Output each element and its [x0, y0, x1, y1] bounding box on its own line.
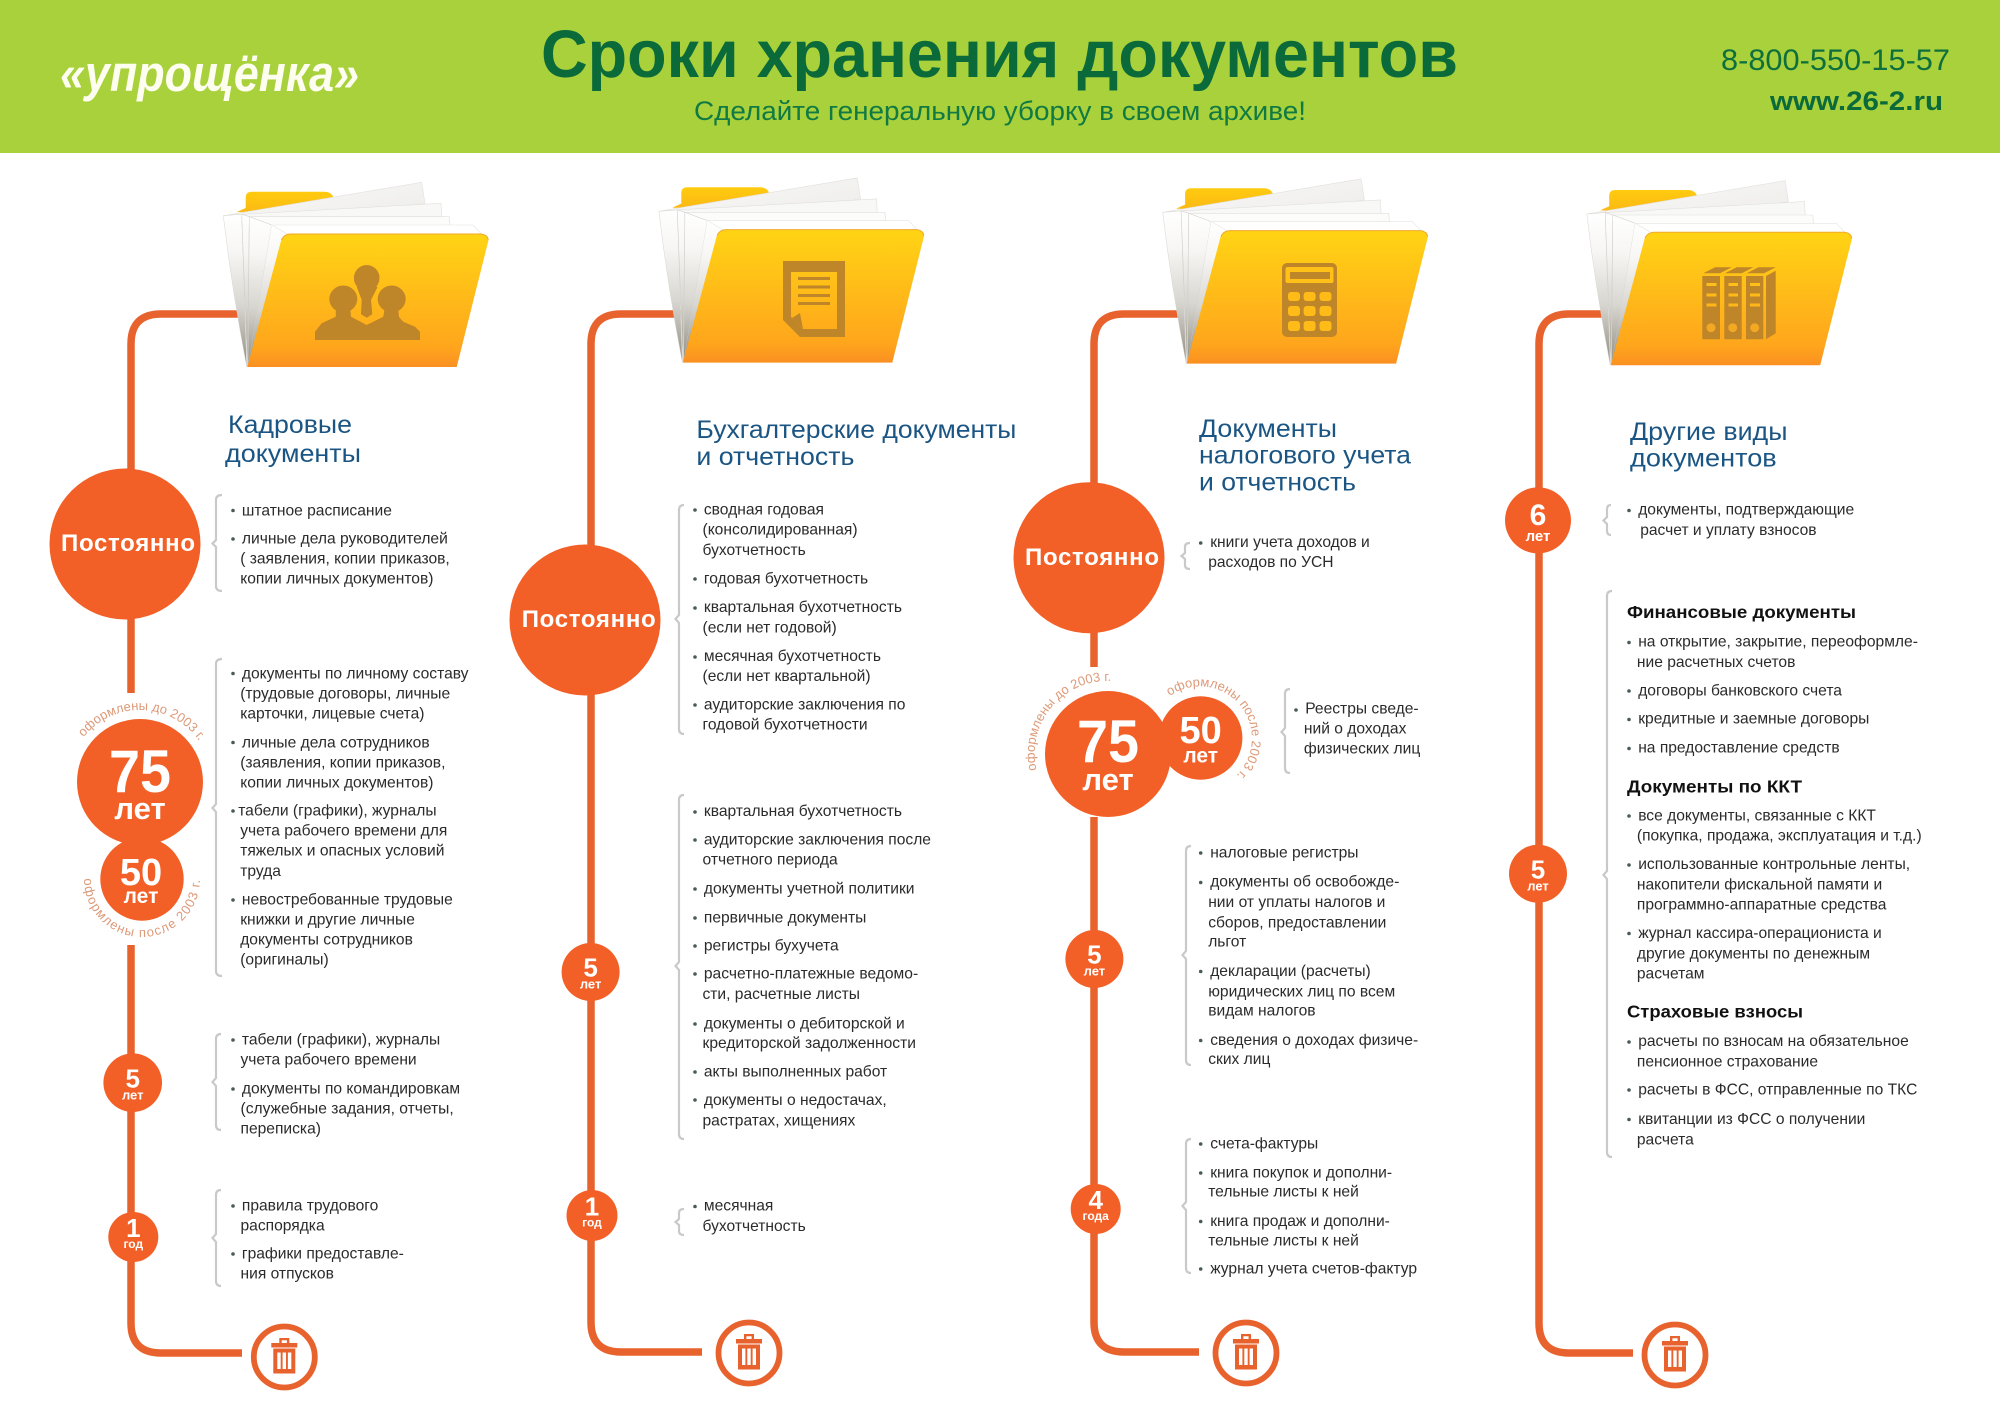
list: permanent: ( заявления, копии приказов,	[240, 550, 450, 567]
badge: 5 years: 5	[125, 1063, 140, 1093]
list: 5 years: все документы, связанные с ККТ	[1638, 807, 1876, 824]
list: 5 years: документы о дебиторской и	[704, 1015, 905, 1032]
list: 5 years	[1182, 844, 1418, 1068]
list: 75/50 years: табели (графики), журналы	[238, 802, 437, 819]
list: permanent: личные дела руководителей	[242, 530, 448, 547]
badge: 5 years	[1509, 845, 1567, 903]
list: 6 years	[1604, 502, 1854, 539]
heading: налогового учета	[1199, 441, 1411, 469]
timeline	[1539, 314, 1633, 1353]
list: 5 years: видам налогов	[1208, 1002, 1316, 1019]
list: 75/50 years	[212, 659, 469, 976]
list: 5 years: ских лиц	[1208, 1051, 1270, 1068]
badge: 4 years	[1071, 1184, 1121, 1234]
list: 5 years: юридических лиц по всем	[1208, 983, 1395, 1000]
list: 5 years: на предоставление средств	[1638, 740, 1840, 757]
heading: financial documents: Финансовые документы	[1627, 602, 1856, 622]
phone: 8-800-550-15-57	[1721, 44, 1950, 77]
title: Сроки хранения документов	[541, 17, 1458, 92]
header band	[0, 0, 2000, 153]
list: 5 years: на открытие, закрытие, переоформле-	[1638, 633, 1918, 650]
panel: other documents	[1505, 181, 1922, 1386]
panel: accounting documents	[510, 178, 1016, 1383]
list: 5 years: сборов, предоставлении	[1208, 914, 1386, 931]
folder with binders icon	[1587, 181, 1852, 365]
timeline	[591, 314, 702, 1352]
list: 75/50 years: личные дела сотрудников	[242, 734, 430, 751]
folder with calculator icon	[1163, 179, 1428, 364]
badge: 5 years: лет	[122, 1087, 143, 1102]
panel: personnel documents	[50, 182, 489, 1390]
list: 75/50 years: Реестры сведе-	[1305, 701, 1419, 718]
badge: 75 and 50 years	[1025, 672, 1261, 817]
badge: 1 year: год	[123, 1237, 143, 1251]
folder with people icon	[223, 182, 488, 367]
list: 1 year: ния отпусков	[241, 1265, 334, 1282]
list: 5 years: нии от уплаты налогов и	[1208, 894, 1385, 911]
list: 5 years: кредиторской задолженности	[702, 1035, 916, 1052]
list: 75/50 years: копии личных документов)	[240, 774, 433, 791]
heading	[225, 411, 361, 468]
list: 5 years: использованные контрольные ленты,	[1638, 856, 1910, 873]
list: 5 years	[1604, 591, 1922, 1157]
list: 5 years: другие документы по денежным	[1637, 945, 1870, 962]
list: 5 years: растратах, хищениях	[702, 1112, 855, 1129]
list: 75/50 years: ний о доходах	[1304, 721, 1407, 738]
badge: 1 year: 1	[126, 1213, 141, 1243]
badge: permanent: Постоянно	[61, 530, 195, 557]
list: 5 years: первичные документы	[704, 909, 866, 926]
badge: 75 and 50 years: 50	[120, 852, 162, 894]
list: 1 year: правила трудового	[242, 1197, 379, 1214]
list: 5 years: акты выполненных работ	[704, 1064, 887, 1081]
badge: 75 and 50 years: оформлены после 2003 г.	[1167, 679, 1261, 778]
list: 4 years: счета-фактуры	[1210, 1135, 1318, 1152]
heading	[696, 416, 1016, 471]
badge: 5 years: 5	[1087, 940, 1102, 970]
list: 4 years: книга покупок и дополни-	[1210, 1164, 1392, 1181]
logo: «упрощёнка»	[60, 45, 359, 102]
list: 5 years: (служебные задания, отчеты,	[241, 1100, 454, 1117]
badge: 75 and 50 years: оформлены после 2003 г.	[82, 878, 200, 938]
list: permanent: сводная годовая	[704, 501, 824, 518]
list: 5 years: льгот	[1208, 933, 1246, 950]
list: 75/50 years: невостребованные трудовые	[242, 891, 453, 908]
list: 75/50 years: труда	[240, 863, 281, 880]
badge: 6 years: лет	[1526, 528, 1550, 545]
list: 5 years: документы об освобожде-	[1210, 874, 1399, 891]
list: permanent	[1182, 534, 1370, 571]
list: 75/50 years: (оригиналы)	[240, 951, 329, 968]
list: 4 years: книга продаж и дополни-	[1210, 1213, 1390, 1230]
badge: 6 years: 6	[1530, 499, 1546, 532]
heading: и отчетность	[696, 443, 854, 471]
list: 4 years: тельные листы к ней	[1208, 1183, 1359, 1200]
icon: trash	[254, 1326, 315, 1388]
subtitle: Сделайте генеральную уборку в своем архиве!	[694, 96, 1306, 126]
list: permanent: квартальная бухотчетность	[704, 599, 902, 616]
list: 5 years: документы по командировкам	[242, 1080, 460, 1097]
panel: tax documents	[1014, 178, 1428, 1386]
timeline	[131, 314, 243, 1353]
list: 1 year: графики предоставле-	[242, 1245, 404, 1262]
icon: trash	[1644, 1324, 1706, 1386]
list: permanent: копии личных документов)	[240, 571, 433, 588]
badge: 75 and 50 years: лет	[1082, 762, 1134, 797]
badge: 5 years	[1065, 930, 1123, 988]
badge: 6 years	[1505, 487, 1571, 553]
list: 75/50 years: документы сотрудников	[240, 931, 413, 948]
badge: 4 years: 4	[1088, 1185, 1103, 1215]
badge: permanent: Постоянно	[522, 606, 656, 633]
list: 4 years: журнал учета счетов-фактур	[1210, 1260, 1417, 1277]
badge: 5 years: 5	[1531, 854, 1545, 884]
list: permanent	[676, 501, 906, 734]
heading: insurance contributions: Страховые взносы	[1627, 1002, 1803, 1022]
list: 75/50 years: учета рабочего времени для	[240, 822, 447, 839]
list: permanent: (консолидированная)	[702, 522, 858, 539]
list: 6 years: документы, подтверждающие	[1638, 502, 1854, 519]
badge: 4 years: года	[1083, 1209, 1109, 1223]
list: 5 years: табели (графики), журналы	[242, 1031, 440, 1048]
icon: trash	[1216, 1322, 1276, 1384]
list: 5 years: документы учетной политики	[704, 880, 914, 897]
icon: trash	[718, 1322, 780, 1384]
list: permanent: годовой бухотчетности	[702, 716, 868, 733]
list: 5 years: расчетам	[1637, 965, 1705, 982]
list: 5 years: программно-аппаратные средства	[1637, 896, 1887, 913]
list: 5 years: накопители фискальной памяти и	[1637, 876, 1882, 893]
list: permanent	[212, 495, 450, 591]
badge: 1 year: год	[582, 1216, 602, 1230]
list: 75/50 years: карточки, лицевые счета)	[240, 705, 424, 722]
list: 75/50 years	[1282, 689, 1420, 773]
list: 6 years: расчет и уплату взносов	[1640, 522, 1817, 539]
badge: 75 and 50 years: 50	[1180, 710, 1222, 752]
badge: 1 year	[108, 1212, 158, 1262]
badge: 5 years: лет	[580, 977, 601, 992]
list: 5 years: (покупка, продажа, эксплуатация и т.д.)	[1637, 827, 1922, 844]
list: 5 years: кредитные и заемные договоры	[1638, 711, 1869, 728]
list: 75/50 years: документы по личному составу	[242, 665, 469, 682]
timeline	[1094, 314, 1199, 1352]
badge: 5 years: лет	[1084, 964, 1105, 979]
folder with document icon	[659, 178, 924, 363]
list: 5 years: аудиторские заключения после	[704, 831, 931, 848]
list: 5 years: расчета	[1637, 1131, 1694, 1148]
heading: Другие виды	[1630, 418, 1788, 446]
list: 1 year	[676, 1198, 806, 1235]
list: 5 years: ние расчетных счетов	[1637, 654, 1795, 671]
badge: 75 and 50 years	[77, 703, 204, 938]
list: 5 years: договоры банковского счета	[1638, 682, 1842, 699]
badge: 1 year	[566, 1190, 618, 1241]
heading: и отчетность	[1199, 469, 1356, 497]
badge: 5 years: лет	[1527, 878, 1549, 893]
badge: 75 and 50 years: 75	[109, 738, 171, 805]
list: 5 years: документы о недостачах,	[704, 1092, 887, 1109]
list: permanent: аудиторские заключения по	[704, 696, 906, 713]
badge: 75 and 50 years: 75	[1077, 708, 1139, 775]
list: 5 years: сти, расчетные листы	[702, 986, 860, 1003]
list: permanent: (если нет годовой)	[702, 619, 837, 636]
badge: permanent	[1014, 482, 1164, 633]
list: 5 years: налоговые регистры	[1210, 844, 1359, 861]
badge: 75 and 50 years: лет	[124, 885, 158, 908]
list: 5 years: журнал кассира-операциониста и	[1638, 925, 1882, 942]
list: 1 year: распорядка	[241, 1217, 325, 1234]
badge: permanent: Постоянно	[1025, 544, 1159, 571]
badge: 75 and 50 years: лет	[114, 791, 166, 826]
list: 5 years: переписка)	[241, 1120, 321, 1137]
website: www.26-2.ru	[1769, 86, 1943, 116]
list: 75/50 years: (заявления, копии приказов,	[240, 754, 445, 771]
badge: 75 and 50 years: оформлены до 2003 г.	[80, 703, 204, 740]
list: permanent: (если нет квартальной)	[702, 668, 871, 685]
list: 4 years: тельные листы к ней	[1208, 1232, 1359, 1249]
list: 1 year: месячная	[704, 1198, 773, 1215]
list: 75/50 years: физических лиц	[1304, 741, 1420, 758]
badge: 5 years: 5	[583, 953, 598, 983]
heading: Кадровые	[228, 411, 352, 439]
heading: cash register documents: Документы по ККТ	[1627, 776, 1802, 796]
heading	[1630, 418, 1788, 473]
heading	[1199, 415, 1411, 497]
badge: permanent	[50, 468, 200, 620]
list: 5 years: расчетно-платежные ведомо-	[704, 965, 918, 982]
list: 5 years: квартальная бухотчетность	[704, 803, 902, 820]
list: 5 years	[676, 795, 931, 1139]
badge: 75 and 50 years: оформлены до 2003 г.	[1025, 672, 1110, 770]
list: 5 years: квитанции из ФСС о получении	[1638, 1111, 1865, 1128]
list: 1 year	[212, 1190, 404, 1286]
list: 75/50 years: тяжелых и опасных условий	[240, 842, 444, 859]
list: 75/50 years: книжки и другие личные	[240, 911, 415, 928]
list: 5 years: сведения о доходах физиче-	[1210, 1032, 1418, 1049]
list: permanent: расходов по УСН	[1208, 554, 1334, 571]
badge: permanent	[510, 544, 660, 696]
list: 5 years: регистры бухучета	[704, 937, 839, 954]
badge: 75 and 50 years: лет	[1183, 745, 1218, 768]
list: 1 year: бухотчетность	[702, 1218, 806, 1235]
list: 5 years: отчетного периода	[702, 852, 838, 869]
badge: 5 years	[562, 943, 620, 1001]
heading: Бухгалтерские документы	[696, 416, 1016, 444]
list: permanent: месячная бухотчетность	[704, 648, 881, 665]
list: permanent: бухотчетность	[702, 542, 806, 559]
list: permanent: штатное расписание	[242, 502, 392, 519]
heading: документов	[1630, 445, 1777, 473]
list: 5 years: учета рабочего времени	[241, 1051, 417, 1068]
list: 5 years: пенсионное страхование	[1637, 1053, 1818, 1070]
badge: 1 year: 1	[585, 1192, 599, 1222]
heading: Документы	[1199, 415, 1337, 443]
list: 75/50 years: (трудовые договоры, личные	[240, 685, 450, 702]
heading: документы	[225, 440, 361, 468]
list: permanent: книги учета доходов и	[1210, 534, 1370, 551]
list: 5 years: расчеты в ФСС, отправленные по ТКС	[1638, 1081, 1917, 1098]
list: permanent: годовая бухотчетность	[704, 570, 868, 587]
list: 5 years: расчеты по взносам на обязательное	[1638, 1033, 1909, 1050]
list: 4 years	[1182, 1135, 1417, 1277]
list: 5 years	[212, 1031, 460, 1137]
badge: 5 years	[103, 1053, 162, 1112]
list: 5 years: декларации (расчеты)	[1210, 963, 1371, 980]
